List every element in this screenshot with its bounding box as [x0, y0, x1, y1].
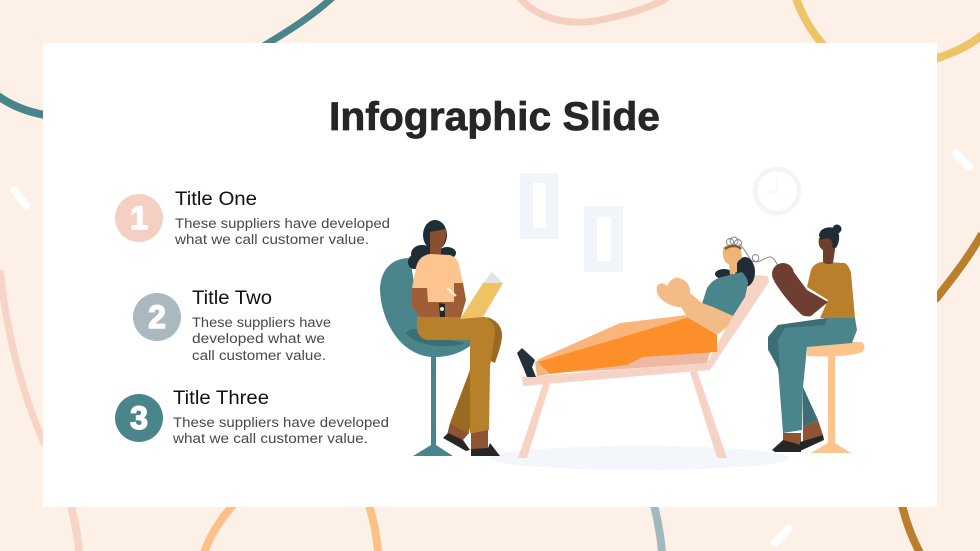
chair frame [522, 275, 769, 386]
item 1 title: Title One [175, 189, 257, 210]
shoes [772, 435, 824, 452]
hair and bun [819, 224, 842, 248]
near trouser leg [417, 317, 495, 433]
wall frame left [520, 173, 558, 239]
item 3 title: Title Three [173, 388, 269, 409]
item 1 text: These suppliers have developed [175, 216, 390, 231]
second therapist on stool [768, 224, 864, 453]
orange trousers [538, 317, 717, 374]
badge 1 [115, 194, 163, 242]
item 2 text [192, 315, 331, 363]
hair [715, 257, 755, 287]
badge 2: 2 [148, 299, 166, 335]
item 1 text [174, 216, 390, 247]
teal shirt [700, 272, 748, 316]
therapist seated with notebook [380, 220, 503, 456]
wall clock [755, 169, 799, 213]
far trouser leg [803, 387, 818, 427]
badge 3: 3 [130, 400, 148, 436]
white content panel [43, 43, 937, 507]
patient on lounge chair [517, 237, 778, 458]
foot [535, 358, 550, 376]
shoes [517, 348, 536, 377]
teal trousers [768, 318, 857, 433]
mustard shirt [807, 262, 855, 318]
stool [807, 342, 864, 453]
item 2 text: developed what we [192, 331, 325, 346]
peach shirt [412, 254, 463, 302]
badge 1: 1 [130, 200, 148, 236]
feet [783, 420, 823, 445]
face and neck [430, 229, 446, 256]
badge 3 [115, 394, 163, 442]
item 1 text: what we call customer value. [174, 232, 369, 247]
item 3 text: These suppliers have developed [173, 415, 389, 430]
pen [447, 288, 456, 296]
arm and hands [772, 263, 828, 316]
item 2 text: call customer value. [192, 348, 326, 363]
neck and face [819, 236, 836, 264]
chair legs [518, 371, 727, 458]
list item 3 [115, 388, 389, 446]
hair [408, 220, 456, 269]
item 3 text: what we call customer value. [172, 431, 368, 446]
list item 1 [115, 189, 390, 247]
feet and shoes [443, 423, 500, 456]
arms [412, 283, 466, 317]
trouser shading [768, 318, 827, 373]
tangled thoughts scribble [725, 237, 778, 266]
far leg [537, 315, 690, 365]
cushion [550, 352, 710, 373]
title: Infographic Slide [329, 95, 660, 139]
floor shadow [490, 446, 790, 470]
item 2 text: These suppliers have [192, 315, 331, 330]
item 2 title: Title Two [192, 288, 272, 309]
arm [677, 293, 733, 335]
item 3 text [172, 415, 389, 446]
far trouser leg [450, 317, 502, 433]
list item 2 [133, 288, 331, 363]
round chair [380, 258, 470, 456]
wall frame right [584, 206, 623, 272]
watch [439, 303, 445, 317]
hands [657, 277, 690, 307]
neck and face [723, 245, 742, 275]
therapy room illustration [380, 169, 864, 470]
notebook [460, 272, 503, 319]
badge 2 [133, 293, 181, 341]
